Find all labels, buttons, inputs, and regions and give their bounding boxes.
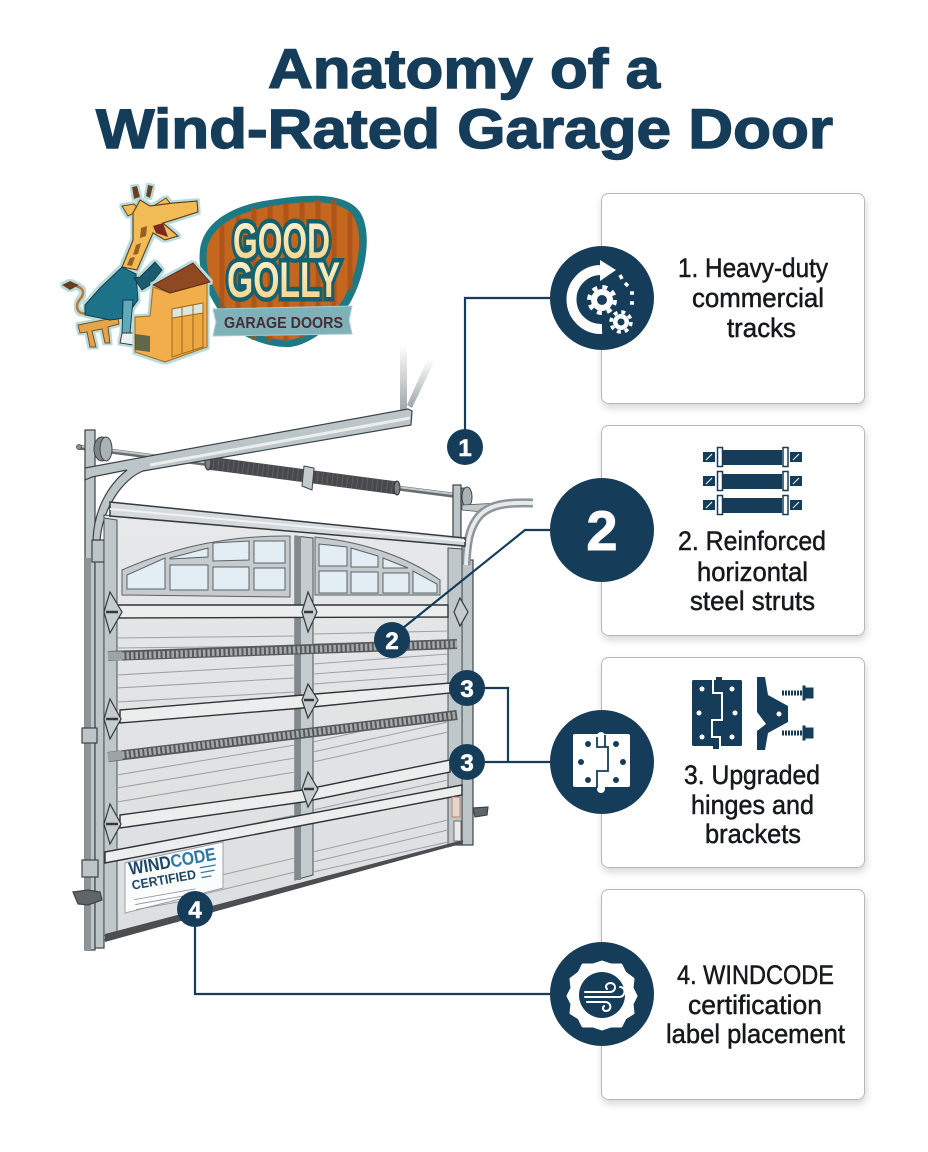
card 3 text: hinges and — [691, 790, 814, 820]
logo house — [135, 263, 210, 362]
window right — [315, 537, 440, 595]
horizontal hinge rails — [105, 605, 462, 863]
icon circle: hinge — [550, 710, 654, 814]
logo: Good Golly Garage Doors — [62, 185, 367, 362]
top header rail — [110, 502, 465, 546]
door panels — [104, 515, 462, 940]
window left — [122, 536, 290, 597]
bottom seal — [105, 840, 463, 942]
logo giraffe mascot — [62, 185, 198, 347]
logo badge: GOOD — [233, 213, 330, 269]
icon: three steel struts — [703, 448, 802, 514]
WINDCODE certified label: WINDCODE — [127, 844, 217, 879]
card 4 text: certification — [688, 990, 822, 1020]
icon: bracket and screws — [757, 677, 813, 750]
card 1 text: commercial — [692, 283, 824, 313]
callout badge 3 upper — [449, 670, 485, 706]
title: Wind-Rated Garage Door — [96, 97, 833, 160]
title: Anatomy of a — [268, 37, 661, 100]
card 1 text: 1. Heavy-duty — [678, 253, 828, 283]
icon: hinge — [692, 677, 742, 749]
reinforced strut upper — [108, 644, 457, 656]
panel: card 4 WINDCODE label — [602, 890, 864, 1100]
card 1 text: tracks — [727, 313, 796, 343]
callout badge 2 — [374, 622, 410, 658]
card 2 text: steel struts — [690, 586, 815, 616]
upper track hanger — [400, 345, 434, 410]
panel: card 2 steel struts — [602, 426, 864, 636]
drums and bearing — [76, 437, 472, 507]
leader lines — [195, 298, 555, 994]
callout badge 1 — [447, 429, 483, 465]
card 4 text: label placement — [666, 1019, 845, 1049]
callout badge 3 lower: 3 — [460, 750, 474, 777]
garage door illustration — [73, 345, 533, 950]
left jamb — [73, 430, 104, 950]
callout badge 1: 1 — [458, 435, 472, 462]
reinforced strut lower — [108, 715, 457, 757]
logo badge — [200, 196, 367, 347]
left, center and right stiles — [104, 518, 462, 936]
torsion shaft and spring — [78, 446, 460, 496]
card 2 text: 2. Reinforced — [678, 526, 826, 556]
panel: card 3 hinges and brackets — [602, 658, 864, 868]
callout badge 3 lower — [449, 744, 485, 780]
WINDCODE certified label: CERTIFIED — [131, 867, 197, 893]
icon circle: gears and arrow — [550, 246, 654, 350]
logo badge: GOLLY — [227, 252, 340, 308]
card 1 text — [678, 253, 828, 343]
callout badge 3 upper: 3 — [460, 676, 474, 703]
WINDCODE certified label — [125, 842, 223, 913]
icon circle: number 2 — [550, 478, 654, 582]
card 3 text: brackets — [705, 819, 801, 849]
panel: card 1 heavy-duty tracks — [602, 194, 864, 404]
callout badge 4 — [177, 891, 213, 927]
card 2 text: horizontal — [697, 557, 808, 587]
safety labels — [452, 797, 461, 841]
panel embossed lines — [117, 631, 448, 895]
icon circle: number 2: 2 — [586, 499, 618, 562]
card 4 text: 4. WINDCODE — [677, 960, 834, 990]
card 4 text — [666, 960, 845, 1049]
callout badge 2: 2 — [385, 628, 399, 655]
icon circle: wind certification — [550, 942, 654, 1046]
card 3 text — [684, 760, 820, 849]
card 3 text: 3. Upgraded — [684, 760, 820, 790]
hinges — [104, 592, 468, 844]
logo badge: GARAGE DOORS — [224, 315, 343, 332]
horizontal track — [85, 409, 412, 540]
card 2 text — [678, 526, 826, 616]
title — [96, 37, 833, 160]
callout badge 4: 4 — [188, 897, 202, 924]
right jamb and track — [453, 485, 533, 845]
